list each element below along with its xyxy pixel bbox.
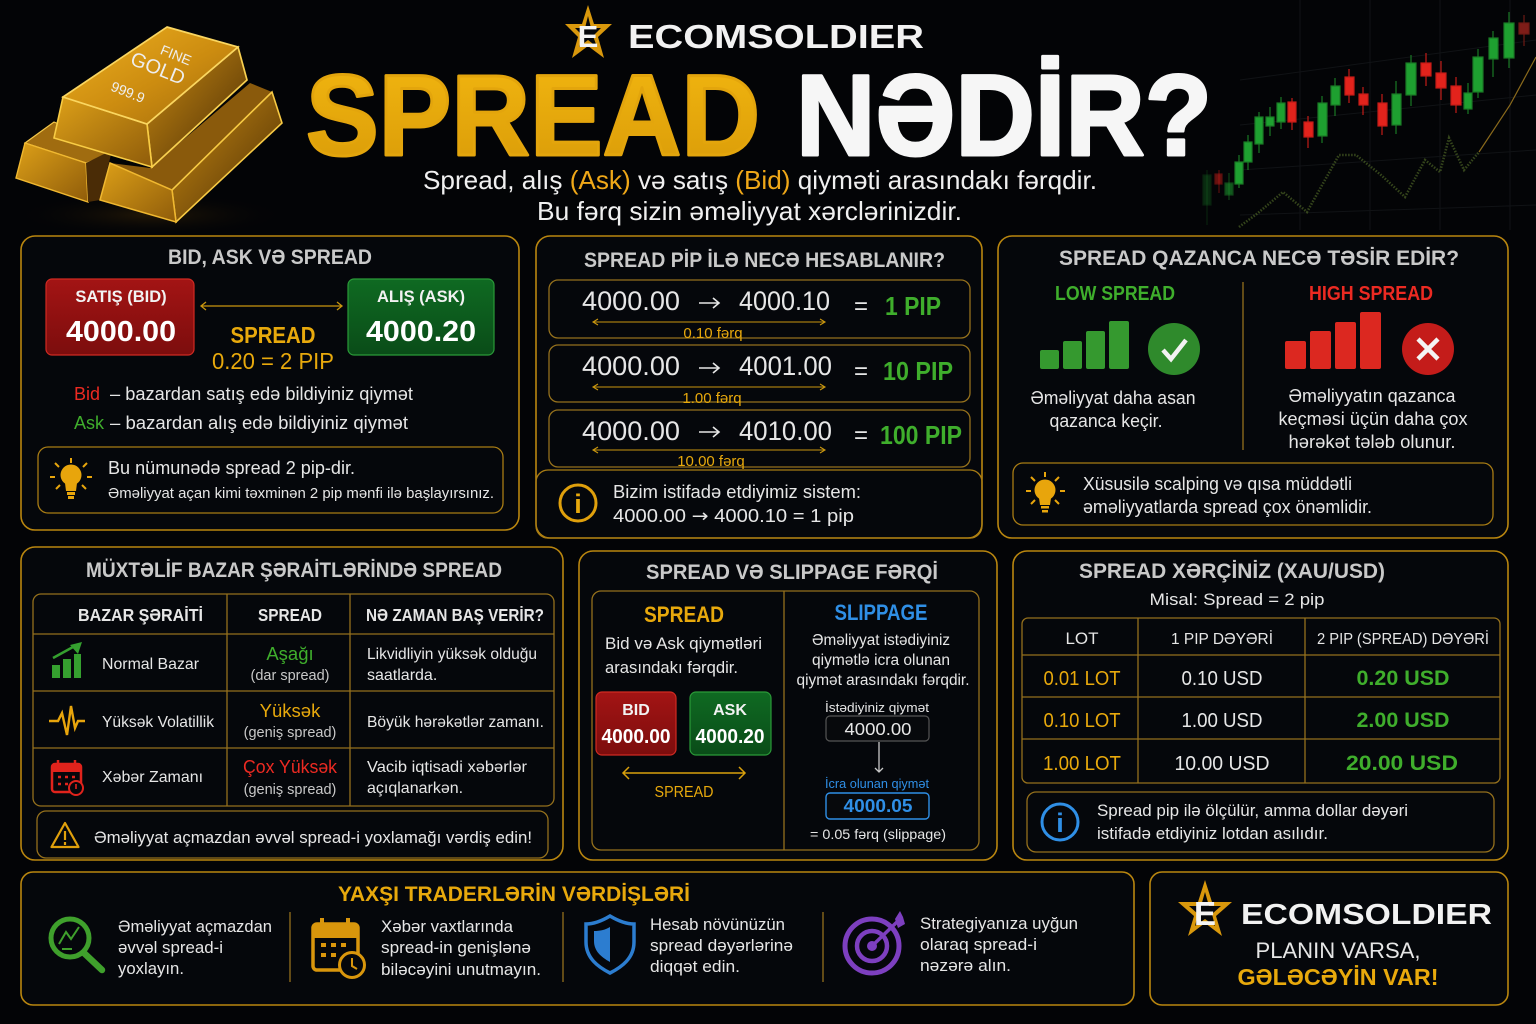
icon: cross bbox=[1402, 323, 1454, 375]
habit: strategy: Strategiyanıza uyğun bbox=[920, 914, 1078, 933]
bid price box: 4000.00 bbox=[66, 316, 176, 348]
row: 1 pip: 4000.00 bbox=[582, 286, 680, 316]
high spread column: HIGH SPREAD bbox=[1309, 283, 1433, 305]
callout: Əməliyyat açan kimi təxminən 2 pip mənfi ilə başlayırsınız. bbox=[108, 486, 494, 502]
habit: check spread: yoxlayın. bbox=[118, 959, 184, 978]
subtitle: Spread, alış (Ask) və satış (Bid) qiyməti arasındakı fərqdir. bbox=[423, 165, 1097, 195]
heading: SPREAD VƏ SLIPPAGE FƏRQİ bbox=[646, 561, 938, 584]
executed price bbox=[826, 793, 929, 819]
row: high volatility: Böyük hərəkətlər zamanı. bbox=[367, 714, 544, 731]
spread column bbox=[596, 602, 771, 801]
low spread column: qazanca keçir. bbox=[1050, 411, 1162, 431]
icon: warning triangle bbox=[52, 823, 78, 847]
row: news time: Xəbər Zamanı bbox=[102, 769, 203, 786]
row: 10 pip: = bbox=[854, 358, 868, 385]
cost table: 0.10 LOT bbox=[1044, 710, 1120, 732]
icon: calendar bbox=[52, 760, 83, 795]
habit: check spread: əvvəl spread-i bbox=[118, 938, 223, 957]
slippage column: Əməliyyat istədiyiniz bbox=[812, 632, 950, 649]
arrow bbox=[875, 742, 883, 772]
habit: news times bbox=[313, 917, 541, 979]
slogan bbox=[1238, 938, 1438, 990]
row: normal market: (dar spread) bbox=[251, 668, 329, 684]
heading: SPREAD PİP İLƏ NECƏ HESABLANIR? bbox=[584, 249, 945, 272]
row: high volatility: (geniş spread) bbox=[244, 725, 336, 741]
row: normal market: Normal Bazar bbox=[102, 656, 200, 673]
definitions bbox=[74, 384, 413, 433]
row: news time bbox=[52, 756, 528, 798]
arrow bbox=[623, 767, 745, 779]
icon: pulse bbox=[49, 706, 85, 735]
ask box: 4000.20 bbox=[696, 726, 764, 748]
cost table: LOT bbox=[1065, 629, 1099, 648]
icon: check bbox=[1148, 323, 1200, 375]
slippage column: İcra olunan qiymət bbox=[825, 776, 929, 791]
ask price box bbox=[348, 279, 494, 355]
icon: target bbox=[845, 911, 905, 973]
row: 1 pip: 4000.10 bbox=[739, 286, 830, 316]
high spread column: hərəkət tələb olunur. bbox=[1288, 432, 1456, 452]
panel: spread cost bbox=[1013, 551, 1508, 860]
heading: BID, ASK VƏ SPREAD bbox=[168, 246, 372, 269]
cost table: 10.00 USD bbox=[1174, 753, 1270, 775]
habit: account type bbox=[586, 915, 793, 976]
gold bar engraving: FINE bbox=[158, 42, 194, 68]
habit: account type: spread dəyərlərinə bbox=[650, 936, 793, 955]
callout: lot note bbox=[1027, 792, 1494, 852]
row: 10 pip: 4001.00 bbox=[739, 351, 832, 381]
bid box: BID bbox=[622, 702, 650, 719]
heading: MÜXTƏLİF BAZAR ŞƏRAİTLƏRİNDƏ SPREAD bbox=[86, 559, 502, 582]
table header: SPREAD bbox=[258, 605, 322, 625]
spread column: SPREAD bbox=[654, 784, 714, 801]
row: high volatility: Yüksək bbox=[260, 700, 321, 721]
callout bbox=[1013, 463, 1493, 525]
icon: light bulb bbox=[1026, 472, 1065, 512]
icon: info bbox=[1042, 804, 1078, 840]
panel: profit effect bbox=[998, 236, 1508, 538]
callout: warning bbox=[37, 811, 548, 858]
icon: info bbox=[560, 485, 596, 521]
icon: info: i bbox=[1056, 808, 1064, 838]
cost table bbox=[1022, 618, 1500, 783]
spread column: arasındakı fərqdir. bbox=[605, 658, 738, 677]
spread column: Bid və Ask qiymətləri bbox=[605, 634, 762, 653]
requested price bbox=[826, 716, 929, 741]
habit: account type: diqqət edin. bbox=[650, 957, 740, 976]
row: normal market: Likvidliyin yüksək olduğu bbox=[367, 646, 537, 663]
logo: ECOMSOLDIER bbox=[1241, 899, 1492, 931]
row: 10 pip: 1.00 fərq bbox=[682, 390, 742, 407]
row: normal market: Aşağı bbox=[266, 643, 314, 664]
icon: rising bars bbox=[52, 642, 82, 678]
callout: Bu nümunədə spread 2 pip-dir. bbox=[108, 458, 355, 478]
panel: bid ask spread bbox=[21, 236, 519, 530]
definitions: Bid bbox=[74, 384, 100, 404]
row: news time: açıqlanarkən. bbox=[367, 780, 463, 797]
callout: system bbox=[536, 470, 982, 538]
slippage column: qiymət arasındakı fərqdir. bbox=[796, 672, 970, 689]
icon: calendar with clock bbox=[313, 918, 364, 978]
table bbox=[33, 594, 554, 806]
cost table: 0.01 LOT bbox=[1044, 668, 1120, 690]
ask price box: ALIŞ (ASK) bbox=[377, 288, 465, 306]
slippage column: İstədiyiniz qiymət bbox=[825, 700, 929, 715]
row: normal market bbox=[52, 642, 537, 684]
callout: lot note: istifadə etdiyiniz lotdan asılıdır. bbox=[1097, 824, 1328, 843]
high spread column bbox=[1278, 283, 1468, 452]
gold bar engraving bbox=[109, 42, 194, 106]
row: 100 pip: 4000.00 bbox=[582, 416, 680, 446]
spread value bbox=[212, 322, 334, 374]
table header bbox=[78, 605, 544, 625]
low spread column bbox=[1030, 283, 1200, 431]
row: 100 pip: 100 PIP bbox=[880, 420, 962, 450]
callout: əməliyyatlarda spread çox önəmlidir. bbox=[1083, 497, 1372, 517]
table header: NƏ ZAMAN BAŞ VERİR? bbox=[366, 605, 544, 625]
executed price: 4000.05 bbox=[844, 796, 912, 816]
habit: news times: Xəbər vaxtlarında bbox=[381, 917, 514, 936]
panel: pip calculation bbox=[536, 236, 982, 538]
callout: system: 4000.00 → 4000.10 = 1 pip bbox=[613, 506, 854, 527]
cost table: 20.00 USD bbox=[1346, 752, 1458, 775]
slippage column: = 0.05 fərq (slippage) bbox=[810, 826, 946, 842]
ask box bbox=[690, 692, 771, 755]
callout: Xüsusilə scalping və qısa müddətli bbox=[1083, 474, 1352, 494]
heading: YAXŞI TRADERLƏRİN VƏRDİŞLƏRİ bbox=[338, 883, 690, 906]
ask box: ASK bbox=[713, 702, 747, 719]
low spread column: LOW SPREAD bbox=[1055, 283, 1175, 305]
habit: check spread: Əməliyyat açmazdan bbox=[118, 917, 272, 936]
cost table: 0.10 USD bbox=[1182, 668, 1262, 690]
bid price box: SATIŞ (BID) bbox=[75, 288, 167, 306]
callout: system: Bizim istifadə etdiyimiz sistem: bbox=[613, 482, 861, 502]
row: news time: Vacib iqtisadi xəbərlər bbox=[367, 759, 528, 776]
row: 10 pip: 10 PIP bbox=[883, 356, 953, 386]
callout: warning: Əməliyyat açmazdan əvvəl spread-i yoxlamağı vərdiş edin! bbox=[94, 828, 532, 847]
slogan: GƏLƏCƏYİN VAR! bbox=[1238, 964, 1438, 990]
subtitle bbox=[423, 165, 1097, 226]
icon: magnifier bbox=[51, 919, 102, 970]
row: 100 pip: 4010.00 bbox=[739, 416, 832, 446]
bid box: 4000.00 bbox=[602, 726, 670, 748]
ask price box: 4000.20 bbox=[366, 316, 476, 348]
habit: strategy: nəzərə alın. bbox=[920, 956, 1011, 975]
gold bar engraving: 999.9 bbox=[109, 78, 147, 106]
cost table: 1.00 LOT bbox=[1043, 753, 1121, 775]
main title: SPREAD bbox=[306, 52, 760, 180]
row: high volatility: Yüksək Volatillik bbox=[102, 714, 215, 731]
illustration: gold bars bbox=[10, 27, 290, 237]
panel: market conditions bbox=[21, 547, 563, 860]
spread value: SPREAD bbox=[230, 322, 316, 348]
row: 100 pip bbox=[549, 410, 970, 470]
illustration: candlestick chart bbox=[1203, 0, 1536, 230]
habit: account type: Hesab növünüzün bbox=[650, 915, 785, 934]
callout: lot note: Spread pip ilə ölçülür, amma dollar dəyəri bbox=[1097, 801, 1408, 820]
definitions: Ask bbox=[74, 413, 105, 433]
cost table: 1.00 USD bbox=[1182, 710, 1262, 732]
habit: news times: biləcəyini unutmayın. bbox=[381, 960, 541, 979]
definitions: – bazardan alış edə bildiyiniz qiymət bbox=[110, 413, 408, 433]
logo: E bbox=[1194, 895, 1216, 932]
definitions: – bazardan satış edə bildiyiniz qiymət bbox=[110, 384, 413, 404]
high spread column: Əməliyyatın qazanca bbox=[1288, 386, 1456, 406]
cost table: 1 PIP DƏYƏRİ bbox=[1171, 630, 1273, 648]
row: high volatility bbox=[49, 700, 544, 741]
subtitle: Bu fərq sizin əməliyyat xərclərinizdir. bbox=[537, 196, 962, 226]
habit: check spread bbox=[51, 917, 272, 978]
heading: SPREAD QAZANCA NECƏ TƏSİR EDİR? bbox=[1059, 247, 1459, 270]
slippage column: qiymətlə icra olunan bbox=[812, 652, 950, 669]
slippage column: SLIPPAGE bbox=[834, 600, 928, 625]
main title: NƏDİR? bbox=[796, 52, 1212, 180]
bid box bbox=[596, 692, 676, 755]
panel: brand slogan bbox=[1150, 872, 1508, 1005]
row: 10 pip: 4000.00 bbox=[582, 351, 680, 381]
panel: good trader habits bbox=[21, 872, 1134, 1005]
requested price: 4000.00 bbox=[844, 719, 912, 739]
high spread column: keçməsi üçün daha çox bbox=[1278, 409, 1468, 429]
spread value: 0.20 = 2 PIP bbox=[212, 348, 334, 374]
row: 1 pip bbox=[549, 280, 970, 342]
logo: top: ECOMSOLDIER bbox=[628, 18, 924, 55]
low spread column: Əməliyyat daha asan bbox=[1030, 388, 1196, 408]
habit: news times: spread-in genişlənə bbox=[381, 938, 531, 957]
row: news time: (geniş spread) bbox=[244, 782, 336, 798]
slippage column bbox=[796, 600, 970, 842]
row: 100 pip: = bbox=[854, 422, 868, 449]
heading: SPREAD XƏRÇİNİZ (XAU/USD) bbox=[1079, 560, 1385, 583]
main title bbox=[306, 52, 1212, 180]
panel: spread cost: Misal: Spread = 2 pip bbox=[1150, 590, 1324, 609]
row: 1 pip: = bbox=[854, 293, 868, 320]
table header: BAZAR ŞƏRAİTİ bbox=[78, 605, 203, 625]
row: 1 pip: 0.10 fərq bbox=[683, 325, 743, 342]
callout bbox=[38, 447, 503, 513]
row: news time: Çox Yüksək bbox=[243, 756, 338, 777]
panel: spread vs slippage bbox=[579, 551, 997, 860]
spread arrow bbox=[201, 302, 342, 310]
slogan: PLANIN VARSA, bbox=[1256, 938, 1420, 963]
cost table: 2.00 USD bbox=[1356, 709, 1450, 732]
logo bbox=[1178, 880, 1492, 936]
row: 1 pip: 1 PIP bbox=[885, 291, 941, 321]
icon: shield bbox=[586, 916, 634, 973]
logo: top bbox=[565, 5, 924, 58]
habit: strategy bbox=[845, 911, 1078, 975]
row: 10 pip bbox=[549, 345, 970, 407]
bid price box bbox=[46, 279, 194, 355]
icon: info: i bbox=[574, 489, 582, 519]
cost table: 0.20 USD bbox=[1356, 667, 1450, 690]
habit: strategy: olaraq spread-i bbox=[920, 935, 1037, 954]
logo: top: E bbox=[578, 19, 598, 54]
row: normal market: saatlarda. bbox=[367, 667, 437, 684]
spread column: SPREAD bbox=[644, 602, 724, 627]
cost table: 2 PIP (SPREAD) DƏYƏRİ bbox=[1317, 630, 1489, 648]
icon: light bulb bbox=[50, 458, 92, 499]
gold bar engraving: GOLD bbox=[127, 48, 188, 90]
row: 100 pip: 10.00 fərq bbox=[677, 453, 745, 470]
